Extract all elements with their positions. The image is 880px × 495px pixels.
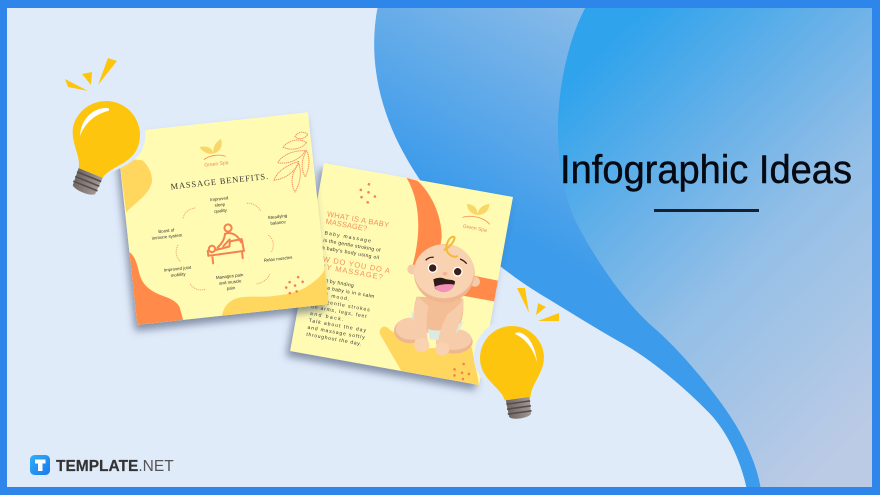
card text: Baby massage	[324, 230, 372, 245]
right arm	[437, 298, 464, 350]
card logo	[199, 138, 229, 169]
logo	[30, 455, 174, 475]
left arm	[413, 297, 428, 343]
highlight	[80, 108, 109, 136]
brows	[426, 257, 467, 264]
sparks: top left bulb	[65, 58, 117, 91]
benefit labels: balance	[270, 219, 287, 226]
benefit labels: Steadying	[267, 213, 288, 220]
wave: inner gradient shape	[558, 5, 880, 490]
orange curved band	[391, 178, 452, 275]
massage icon	[205, 223, 245, 264]
benefit labels: Improved joint	[164, 265, 192, 273]
head	[414, 244, 475, 303]
benefit labels: mobility	[170, 271, 187, 278]
card text: a time baby is in a calm	[314, 283, 375, 300]
blob: bottom left orange	[129, 247, 183, 325]
torso	[414, 297, 463, 335]
title underline	[654, 209, 759, 212]
card text: MASSAGE?	[325, 217, 368, 233]
benefit labels	[148, 189, 296, 298]
hair curl	[444, 237, 458, 257]
halo	[53, 83, 157, 192]
benefit labels: Boost of	[158, 227, 175, 234]
screw base	[71, 168, 103, 197]
wave: outer blue shape	[374, 0, 880, 490]
benefit labels: sleep	[214, 202, 226, 208]
dots top	[357, 182, 378, 205]
logo icon	[30, 455, 50, 475]
orange band right	[453, 272, 498, 301]
highlight	[515, 332, 537, 362]
left leg	[394, 318, 426, 343]
benefit labels: quality	[214, 207, 228, 214]
right leg	[436, 330, 473, 354]
card text: a baby's body using oil	[321, 245, 380, 261]
screw base	[506, 397, 532, 420]
card text: Talk about the day	[308, 318, 367, 334]
dots bottom	[452, 361, 472, 381]
logo wordmark: TEMPLATE.NET	[56, 458, 174, 475]
card text: WHAT IS A BABY	[326, 209, 390, 229]
hands	[414, 338, 429, 352]
sparks: bottom right bulb	[517, 288, 559, 321]
benefit labels: Improved	[210, 195, 229, 202]
card text: Start by finding	[316, 277, 354, 289]
card text: good mood.	[313, 290, 350, 303]
dotted arcs	[172, 200, 277, 292]
light bulb: top left	[47, 83, 157, 207]
card logo	[460, 200, 493, 234]
tongue	[434, 284, 454, 292]
card text: on arms, legs, feet	[311, 304, 368, 320]
benefit labels: Manages pain	[216, 272, 244, 280]
card logo: Green Spa	[462, 224, 487, 234]
title: Infographic Ideas	[560, 148, 852, 192]
logo T	[35, 460, 46, 471]
card text: Use gentle strokes	[312, 297, 371, 313]
card logo: Green Spa	[204, 160, 229, 169]
card heading: MASSAGE BENEFITS.	[170, 171, 269, 191]
card text: BABY MASSAGE?	[308, 259, 384, 282]
nose	[443, 272, 447, 275]
diaper	[411, 310, 425, 334]
card: baby massage	[290, 163, 513, 385]
glass	[476, 322, 549, 403]
blob: top left	[119, 155, 155, 213]
mouth	[433, 278, 455, 291]
card text	[296, 208, 399, 350]
card text: and back.	[310, 311, 344, 323]
card text: throughout the day.	[306, 332, 362, 347]
card: massage benefits	[116, 112, 329, 325]
yellow blob	[373, 326, 486, 385]
card text: HOW DO YOU DO A	[309, 252, 391, 275]
baby illustration	[394, 237, 480, 356]
card text: is the gentle stroking of	[323, 238, 381, 254]
halo	[469, 314, 556, 407]
eyes	[428, 263, 438, 273]
blob: bottom right	[218, 268, 329, 316]
leaves decoration	[269, 131, 314, 194]
benefit labels: and muscle	[219, 278, 242, 286]
glass	[59, 91, 150, 186]
orange dots	[284, 275, 305, 295]
light bulb: bottom right	[469, 314, 558, 424]
card text: and massage softly	[307, 325, 366, 341]
benefit labels: pain	[227, 285, 236, 291]
benefit labels: Relax muscles	[264, 255, 293, 263]
ears	[407, 264, 417, 274]
benefit labels: immune system	[151, 232, 183, 241]
